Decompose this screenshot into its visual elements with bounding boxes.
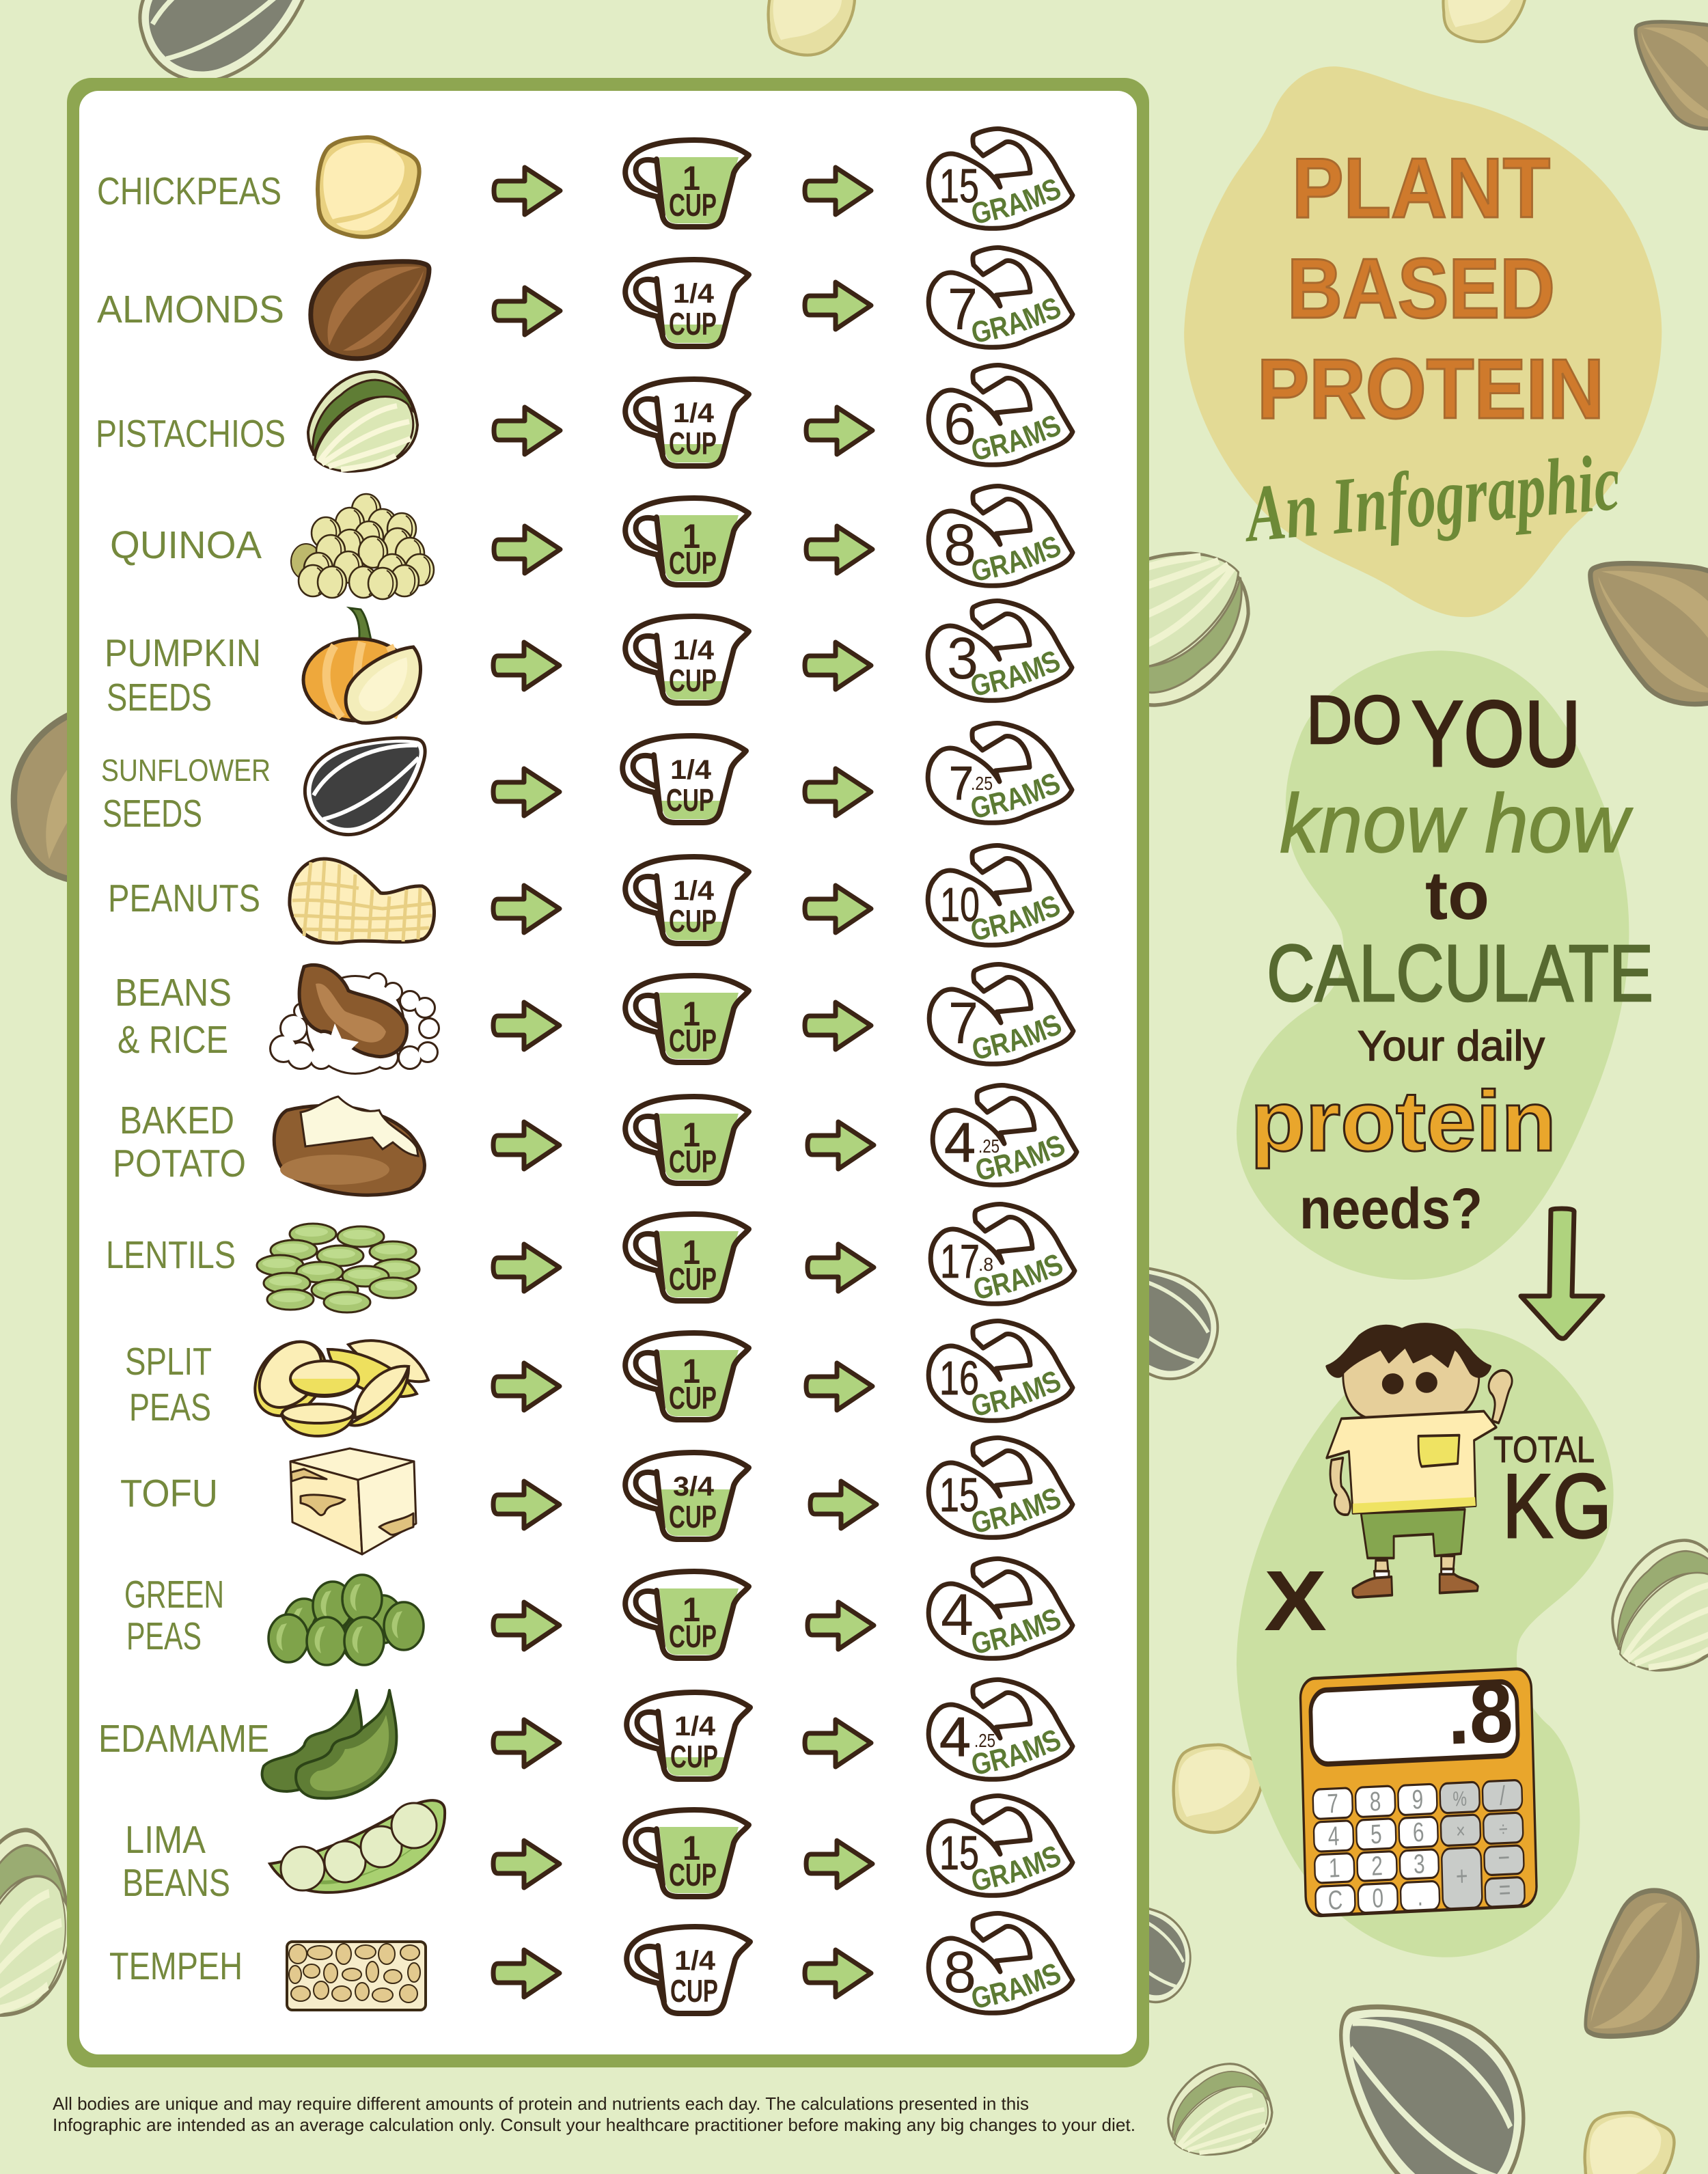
- label: beans and rice: [115, 971, 232, 1062]
- muscle: 4.25 grams: [931, 1083, 1079, 1187]
- measuring cup: 1 cup: [625, 976, 749, 1062]
- label: pumpkin seeds: SEEDS: [107, 676, 212, 719]
- muscle: 4.25 grams: 4: [939, 1706, 971, 1768]
- muscle: 3 grams: GRAMS: [972, 652, 1060, 696]
- muscle: 15 grams: 15: [939, 1826, 979, 1880]
- question text: [1250, 682, 1653, 1241]
- muscle: 17.8 grams: [928, 1202, 1077, 1306]
- calculation blob: [1237, 1328, 1614, 1957]
- muscle: 7 grams: 7: [948, 991, 978, 1056]
- label: lima beans: BEANS: [122, 1861, 230, 1905]
- measuring cup: 3/4 cup: CUP: [669, 1499, 717, 1535]
- arrow: [494, 167, 560, 215]
- arrow: [494, 526, 560, 573]
- label: green peas: GREEN: [124, 1573, 224, 1616]
- muscle: 7 grams: [926, 245, 1075, 350]
- calculator: 1: [1328, 1853, 1340, 1884]
- measuring cup: 1 cup: 1: [683, 159, 700, 197]
- label: sunflower seeds: [101, 753, 271, 836]
- muscle: 7.25 grams: .25: [971, 773, 993, 794]
- row: baked potato: [113, 1083, 1079, 1197]
- label: green peas: PEAS: [126, 1614, 202, 1658]
- icon: tofu: [290, 1448, 416, 1554]
- row: green peas: [124, 1556, 1075, 1666]
- label: beans and rice: & RICE: [118, 1018, 228, 1062]
- muscle: 15 grams: 15: [939, 1468, 979, 1522]
- measuring cup: 1/4 cup: [625, 616, 749, 703]
- calculator: .: [1417, 1882, 1423, 1912]
- row: chickpeas: [97, 126, 1075, 239]
- icon: lima bean pod: [270, 1800, 445, 1893]
- muscle: 7.25 grams: 7: [949, 756, 974, 810]
- muscle: 17.8 grams: .8: [978, 1254, 993, 1275]
- calculator: /: [1499, 1780, 1506, 1811]
- label: sunflower seeds: SUNFLOWER: [101, 753, 271, 788]
- measuring cup: 1 cup: [625, 1571, 749, 1658]
- calculator: =: [1498, 1875, 1511, 1905]
- label: sunflower seeds: SEEDS: [102, 792, 202, 836]
- label: beans and rice: BEANS: [115, 971, 232, 1015]
- question text: know how: [1280, 777, 1633, 870]
- measuring cup: 1 cup: 1: [683, 1116, 700, 1154]
- muscle: 3 grams: [925, 598, 1074, 703]
- muscle: 15 grams: GRAMS: [972, 1488, 1060, 1532]
- icon: quinoa grains: [291, 494, 434, 599]
- measuring cup: 1 cup: CUP: [669, 1857, 717, 1893]
- muscle: 6 grams: [926, 363, 1075, 467]
- icon: almond: [311, 262, 429, 359]
- calculator: [1300, 1664, 1537, 1917]
- question text: DO: [1306, 682, 1402, 758]
- row: pistachios: [96, 363, 1075, 473]
- measuring cup: 1 cup: 1: [683, 1352, 700, 1390]
- calculator: C: [1327, 1885, 1343, 1916]
- label: green peas: [124, 1573, 224, 1658]
- row: pumpkin seeds: [105, 598, 1074, 725]
- arrow: [805, 167, 871, 215]
- row: edamame: [98, 1679, 1073, 1798]
- measuring cup: 1/4 cup, empty: 1/4: [674, 1946, 716, 1976]
- measuring cup: 1/4 cup: CUP: [669, 306, 717, 342]
- measuring cup: 1/4 cup: 1/4: [670, 755, 712, 785]
- measuring cup: 1 cup: CUP: [669, 187, 717, 223]
- calculator: 8: [1369, 1787, 1381, 1817]
- muscle: 16 grams: [926, 1319, 1075, 1423]
- muscle: 17.8 grams: 17: [940, 1235, 980, 1288]
- muscle: 3 grams: 3: [947, 626, 978, 691]
- measuring cup: 1 cup: 1: [683, 1591, 700, 1629]
- measuring cup: 1 cup: CUP: [669, 1261, 717, 1297]
- question text: YOU: [1411, 682, 1581, 786]
- muscle: 15 grams: [926, 1435, 1075, 1540]
- measuring cup: 1/4 cup, empty: CUP: [670, 1973, 718, 2009]
- row: almonds: [97, 245, 1075, 361]
- measuring cup: 1 cup: CUP: [669, 1144, 717, 1179]
- calculator: 3: [1414, 1849, 1425, 1880]
- title: [1257, 141, 1604, 437]
- arrow: [806, 526, 872, 573]
- muscle: 4 grams: [928, 1558, 1073, 1661]
- footer disclaimer: Infographic are intended as an average calculation only. Consult your healthcare practitioner before making any big changes to your diet.: [53, 2115, 1135, 2135]
- measuring cup: 3/4 cup: [625, 1453, 749, 1539]
- muscle: 6 grams: 6: [943, 391, 976, 457]
- label: split peas: [125, 1340, 212, 1429]
- icon: beans and rice: [271, 965, 438, 1073]
- measuring cup: 1 cup: CUP: [669, 1023, 717, 1058]
- measuring cup: 1 cup: CUP: [669, 1619, 717, 1654]
- calculator: ×: [1456, 1819, 1465, 1843]
- icon: split peas: [240, 1327, 428, 1436]
- muscle: 8 grams: GRAMS: [972, 537, 1060, 581]
- measuring cup: 1 cup: 1: [683, 995, 700, 1033]
- arrow: [805, 282, 871, 329]
- arrow: down: [1521, 1209, 1603, 1338]
- muscle: 7.25 grams: GRAMS: [972, 773, 1060, 817]
- measuring cup: 1/4 cup: [625, 260, 749, 346]
- calculator: 6: [1412, 1817, 1424, 1848]
- arrow: [810, 1481, 877, 1528]
- arrow: [493, 769, 560, 816]
- muscle: 4.25 grams: .25: [974, 1730, 995, 1751]
- measuring cup: 1/4 cup: CUP: [666, 782, 714, 818]
- measuring cup: 1/4 cup: 1/4: [674, 1711, 716, 1742]
- muscle: 7 grams: GRAMS: [973, 1015, 1062, 1059]
- label: edamame: EDAMAME: [98, 1717, 269, 1761]
- arrow: [493, 885, 560, 933]
- row: lima beans: [122, 1795, 1073, 1905]
- arrow: [805, 1720, 871, 1767]
- arrow: [808, 1244, 874, 1291]
- measuring cup: 3/4 cup: 3/4: [673, 1472, 715, 1502]
- arrow: [493, 1602, 560, 1649]
- muscle: 7 grams: 7: [948, 277, 978, 342]
- measuring cup: 1/4 cup: [622, 736, 746, 823]
- measuring cup: 1 cup: [625, 1810, 749, 1897]
- measuring cup: 1 cup: 1: [683, 1829, 700, 1867]
- measuring cup: 1/4 cup, empty: [626, 1927, 750, 2013]
- muscle: 15 grams: GRAMS: [972, 1846, 1060, 1890]
- text: total kg: [1493, 1429, 1612, 1557]
- label: pistachios: PISTACHIOS: [96, 412, 286, 456]
- label: lentils: LENTILS: [106, 1233, 236, 1277]
- arrow: [493, 1363, 560, 1410]
- muscle: 4 grams: 4: [941, 1582, 974, 1648]
- arrow: [493, 1841, 560, 1888]
- label: baked potato: [113, 1099, 246, 1185]
- icon: pumpkin and seed: [303, 608, 421, 723]
- label: lima beans: LIMA: [125, 1818, 206, 1862]
- muscle: 10 grams: GRAMS: [972, 896, 1060, 940]
- text: total kg: KG: [1502, 1456, 1612, 1557]
- muscle: 16 grams: GRAMS: [972, 1372, 1060, 1416]
- arrow: [806, 407, 872, 454]
- calculator: 5: [1370, 1819, 1382, 1849]
- muscle: 15 grams: GRAMS: [972, 179, 1060, 223]
- title: PLANT: [1292, 141, 1550, 236]
- measuring cup: 1 cup: [625, 1214, 749, 1301]
- muscle: 4.25 grams: [928, 1679, 1073, 1782]
- measuring cup: 1 cup: [625, 1333, 749, 1420]
- label: split peas: PEAS: [129, 1386, 211, 1429]
- row: peanuts: [108, 843, 1074, 948]
- muscle: 6 grams: GRAMS: [972, 415, 1060, 459]
- question blob: [1237, 650, 1629, 1280]
- muscle: 10 grams: [925, 843, 1074, 948]
- measuring cup: 1 cup: 1: [683, 517, 700, 555]
- measuring cup: 1 cup: CUP: [669, 1380, 717, 1416]
- row: split peas: [125, 1319, 1075, 1437]
- arrow: [806, 1363, 872, 1410]
- label: peanuts: PEANUTS: [108, 877, 260, 920]
- arrow: [805, 642, 871, 689]
- main panel: [67, 78, 1149, 2067]
- calculator: 7: [1327, 1789, 1339, 1819]
- label: almonds: ALMONDS: [97, 288, 284, 331]
- icon: peanut: [290, 859, 435, 943]
- row: tempeh: [109, 1913, 1073, 2015]
- muscle: 4.25 grams: GRAMS: [976, 1136, 1064, 1179]
- multiply sign: X: [1264, 1554, 1327, 1649]
- row: beans and rice: [115, 962, 1075, 1075]
- arrow: [805, 1950, 871, 1997]
- icon: lentils: [257, 1224, 419, 1312]
- label: chickpeas: CHICKPEAS: [97, 169, 281, 213]
- muscle: 15 grams: 15: [939, 159, 979, 212]
- icon: baked potato: [274, 1097, 424, 1195]
- arrow: [493, 1481, 560, 1528]
- measuring cup: 1/4 cup: 1/4: [673, 876, 715, 906]
- muscle: 15 grams: [926, 126, 1075, 231]
- row: quinoa: [110, 484, 1075, 600]
- question text: to: [1425, 857, 1489, 934]
- muscle: 4.25 grams: GRAMS: [972, 1730, 1060, 1774]
- muscle: 7 grams: [926, 962, 1075, 1067]
- muscle: 4.25 grams: 4: [944, 1112, 976, 1174]
- label: split peas: SPLIT: [125, 1340, 212, 1384]
- measuring cup: 1/4 cup: [625, 379, 749, 466]
- arrow: [493, 1244, 560, 1291]
- muscle: 4 grams: GRAMS: [972, 1610, 1060, 1653]
- calculator: 9: [1411, 1785, 1424, 1815]
- muscle: 8 grams: 8: [943, 512, 976, 578]
- measuring cup: 1/4 cup: 1/4: [673, 279, 715, 309]
- title: BASED: [1287, 242, 1555, 336]
- icon: edamame pods: [262, 1690, 396, 1798]
- arrow: [493, 1720, 560, 1767]
- arrow: [805, 1002, 871, 1049]
- icon: chickpea: [318, 137, 419, 237]
- measuring cup: 1/4 cup: [625, 857, 749, 944]
- measuring cup: 1 cup: 1: [683, 1233, 700, 1271]
- row: tofu: [120, 1435, 1075, 1556]
- table of foods: [96, 126, 1079, 2016]
- calculator: 2: [1371, 1851, 1383, 1882]
- measuring cup: 1/4 cup: 1/4: [673, 398, 715, 428]
- footer disclaimer: All bodies are unique and may require different amounts of protein and nutrients each day. The calculations presented in this: [53, 2093, 1029, 2114]
- arrow: [808, 1122, 874, 1169]
- muscle: 8 grams: [926, 484, 1075, 588]
- question text: needs?: [1299, 1177, 1483, 1241]
- calculator: −: [1498, 1843, 1511, 1873]
- title blob: [1184, 66, 1662, 617]
- muscle: 15 grams: [928, 1795, 1073, 1898]
- muscle: 7 grams: GRAMS: [972, 298, 1060, 342]
- measuring cup: 1/4 cup: 1/4: [673, 635, 715, 665]
- calculator: %: [1452, 1786, 1467, 1811]
- measuring cup: 1 cup: CUP: [669, 545, 717, 581]
- muscle: 4.25 grams: .25: [978, 1136, 1000, 1157]
- calculator: .8: [1446, 1664, 1514, 1763]
- calculator: 0: [1372, 1883, 1384, 1914]
- measuring cup: 1 cup: [625, 140, 749, 227]
- measuring cup: 1/4 cup: [626, 1692, 750, 1779]
- arrow: [808, 1602, 874, 1649]
- icon: tempeh: [287, 1942, 426, 2010]
- measuring cup: 1/4 cup: CUP: [669, 663, 717, 698]
- calculator: ÷: [1498, 1817, 1508, 1841]
- label: tofu: TOFU: [120, 1472, 218, 1515]
- icon: green peas: [268, 1575, 424, 1665]
- question text: protein: [1250, 1074, 1556, 1169]
- character: boy: [1327, 1324, 1512, 1597]
- measuring cup: 1/4 cup: CUP: [670, 1739, 718, 1774]
- question text: Your daily: [1358, 1023, 1545, 1070]
- arrow: [805, 769, 871, 816]
- muscle: 8 grams: GRAMS: [972, 1964, 1060, 2007]
- arrow: [493, 1950, 560, 1997]
- icon: pistachio: [308, 372, 417, 471]
- measuring cup: 1/4 cup: CUP: [669, 426, 717, 461]
- arrow: [805, 885, 871, 933]
- muscle: 10 grams: 10: [940, 878, 980, 931]
- arrow: [494, 407, 560, 454]
- arrow: [493, 642, 560, 689]
- text: total kg: TOTAL: [1493, 1429, 1595, 1470]
- calculator: +: [1455, 1861, 1468, 1892]
- muscle: 7.25 grams: [925, 721, 1074, 825]
- label: pumpkin seeds: [105, 631, 261, 719]
- label: tempeh: TEMPEH: [109, 1944, 243, 1988]
- arrow: [494, 288, 560, 335]
- label: pumpkin seeds: PUMPKIN: [105, 631, 261, 675]
- calculator: 4: [1327, 1821, 1340, 1852]
- arrow: [806, 1841, 872, 1888]
- arrow: [493, 1122, 560, 1169]
- muscle: 16 grams: 16: [939, 1351, 979, 1405]
- row: sunflower seeds: [101, 721, 1074, 836]
- measuring cup: 1 cup: [625, 498, 749, 585]
- measuring cup: 1 cup: [625, 1097, 749, 1183]
- arrow: [493, 1002, 560, 1049]
- icon: sunflower seed: [305, 738, 425, 835]
- label: baked potato: BAKED: [120, 1099, 234, 1142]
- muscle: 8 grams: [928, 1913, 1073, 2015]
- label: quinoa: QUINOA: [110, 523, 262, 567]
- row: lentils: [106, 1202, 1077, 1313]
- muscle: 17.8 grams: GRAMS: [974, 1254, 1063, 1298]
- footer disclaimer: [53, 2093, 1135, 2135]
- measuring cup: 1/4 cup: CUP: [669, 903, 717, 939]
- title: PROTEIN: [1257, 342, 1604, 437]
- label: baked potato: POTATO: [113, 1142, 246, 1185]
- label: lima beans: [122, 1818, 230, 1905]
- muscle: 8 grams: 8: [943, 1940, 976, 2005]
